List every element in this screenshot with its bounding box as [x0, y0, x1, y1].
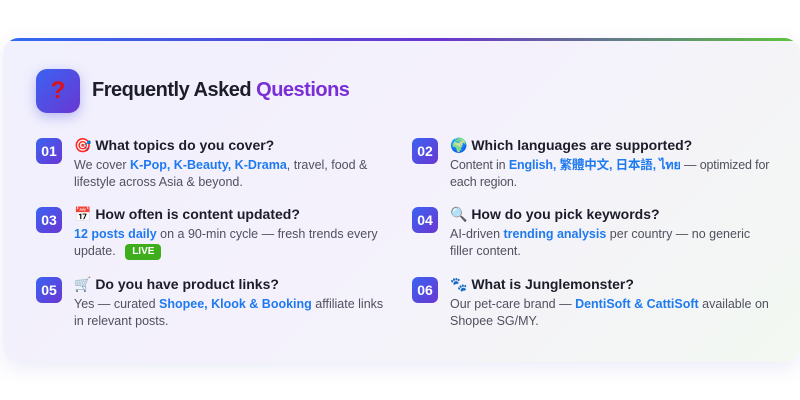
faq item 02	[412, 137, 770, 189]
panel: FAQ card: 🔍 How do you pick keywords?	[450, 206, 660, 222]
panel: FAQ card: AI-driven trending analysis per country — no generic filler content.	[450, 227, 750, 258]
panel: FAQ card: We cover K-Pop, K-Beauty, K-Drama, travel, food & lifestyle across Asia & beyond.	[74, 158, 367, 189]
faq item 01	[36, 137, 368, 189]
panel: FAQ card: 06	[417, 282, 433, 298]
panel: FAQ card: Yes — curated Shopee, Klook & Booking affiliate links in relevant posts.	[74, 297, 383, 328]
panel: FAQ card: 🎯 What topics do you cover?	[74, 137, 274, 153]
faq item 06	[412, 276, 769, 328]
faq item 04	[412, 206, 750, 258]
panel: FAQ card: 12 posts daily on a 90-min cycle — fresh trends every update.	[74, 227, 378, 258]
panel: FAQ card: 🛒 Do you have product links?	[74, 276, 279, 292]
panel: FAQ card: 02	[417, 143, 433, 159]
faq item 03	[36, 206, 378, 260]
panel: FAQ card: 01	[41, 143, 57, 159]
panel: FAQ card: 03	[41, 212, 57, 228]
panel: FAQ card: 🌍 Which languages are supported?	[450, 137, 692, 153]
faq item 05	[36, 276, 383, 328]
panel: FAQ card: Our pet-care brand — DentiSoft & CattiSoft available on Shopee SG/MY.	[450, 297, 769, 328]
panel: FAQ card: 04	[417, 212, 433, 228]
icon: question mark	[36, 69, 80, 113]
title: Frequently Asked Questions	[92, 79, 349, 101]
panel: FAQ card: 📅 How often is content updated?	[74, 206, 300, 222]
icon: question mark: ?	[51, 77, 65, 104]
panel: FAQ card: 05	[41, 282, 57, 298]
panel: FAQ card: LIVE	[132, 246, 154, 257]
panel: FAQ card: 🐾 What is Junglemonster?	[450, 276, 634, 292]
panel: FAQ card: Content in English, 繁體中文, 日本語, ไทย — optimized for each region.	[450, 158, 769, 189]
